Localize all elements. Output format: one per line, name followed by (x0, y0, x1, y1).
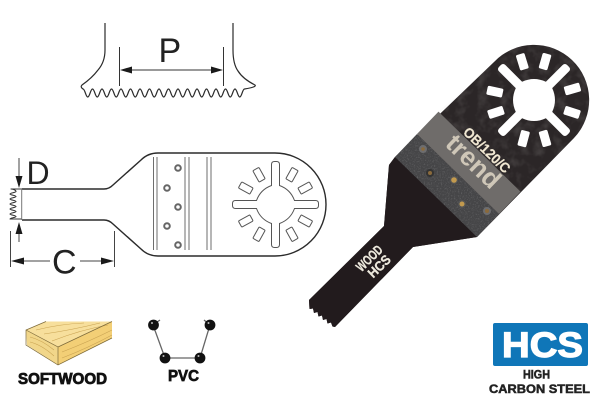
strip fold lines (154, 157, 211, 250)
badge: HCS high carbon steel (489, 323, 590, 396)
rivets (419, 145, 491, 215)
tooth base line (21, 189, 23, 220)
icon: PVC molecule (148, 320, 215, 363)
end face (26, 330, 58, 365)
product code: OB/120/C (460, 124, 514, 176)
brand: trend: trend (440, 128, 507, 195)
depth arrows (16, 158, 22, 242)
label SOFTWOOD: SOFTWOOD (18, 371, 107, 388)
mounting cutout (466, 32, 600, 168)
plank edges (26, 322, 112, 365)
light band (417, 112, 520, 214)
shank shading (309, 157, 477, 327)
diagram: blade technical drawing (10, 153, 326, 282)
blade outline (22, 153, 326, 256)
badge letters: HCS (502, 325, 583, 365)
atoms (148, 320, 215, 363)
label HCS: HCS (365, 252, 394, 281)
length dimension arrows (10, 231, 114, 267)
caption line one: HIGH (523, 368, 550, 382)
speckled band (395, 134, 499, 237)
diagram: tooth pitch P (81, 23, 255, 97)
mounting cutout (232, 162, 318, 248)
blade outline with teeth (81, 23, 255, 97)
label P: P (158, 32, 181, 70)
label D: D (26, 155, 50, 191)
head mottling (438, 45, 589, 192)
icon: softwood plank (26, 322, 112, 365)
photo: trend oscillating blade (309, 32, 600, 327)
toothed end (10, 189, 22, 219)
rivet holes (164, 165, 181, 248)
label PVC: PVC (168, 368, 199, 385)
top face (26, 322, 112, 347)
label WOOD: WOOD (353, 242, 386, 275)
side face (58, 322, 112, 365)
wood grain and outline (30, 323, 112, 358)
atom highlights (151, 322, 210, 357)
label C: C (52, 244, 77, 282)
blade body (309, 45, 589, 327)
speckle texture (395, 134, 499, 237)
pitch extension lines and arrow (120, 47, 224, 86)
blue badge (493, 323, 588, 366)
caption line two: CARBON STEEL (489, 382, 590, 396)
bonds (153, 320, 210, 358)
